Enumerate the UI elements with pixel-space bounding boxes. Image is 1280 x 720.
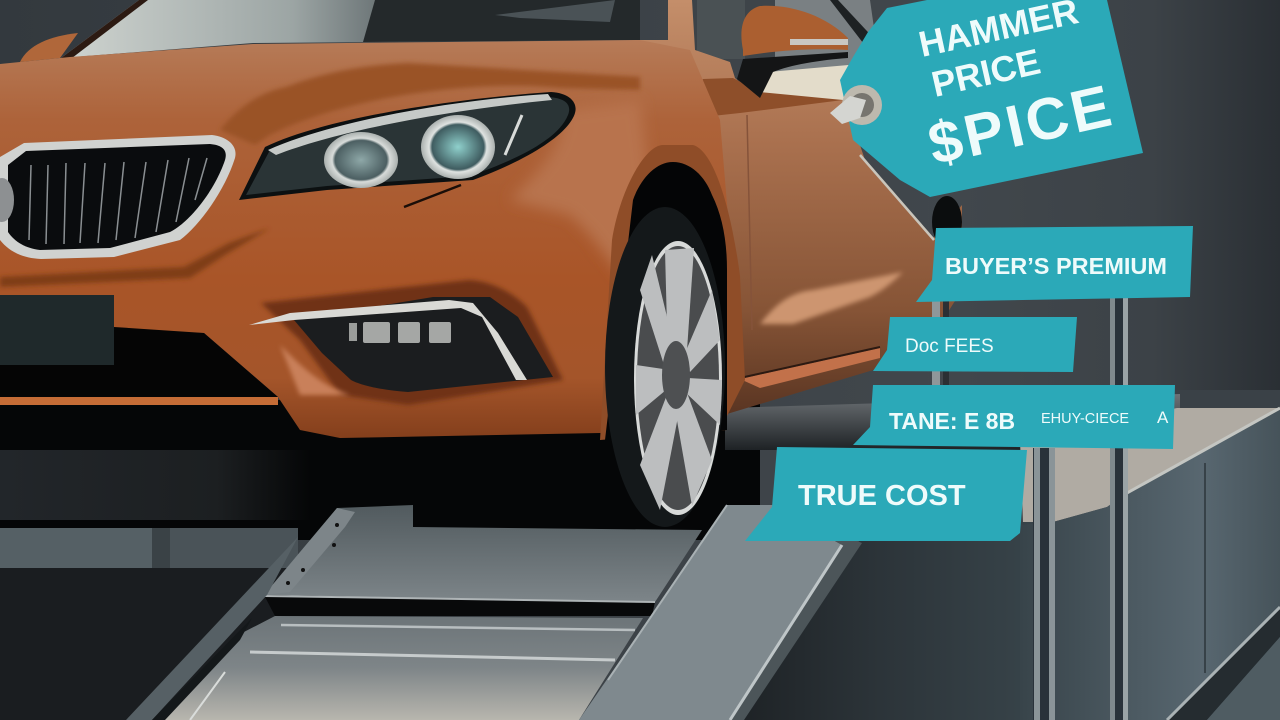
label: doc fees: Doc FEES xyxy=(905,336,994,357)
label: taxes and extras: A xyxy=(1157,408,1169,427)
spokes xyxy=(636,248,722,510)
label: buyer's premium xyxy=(916,226,1193,302)
label: true cost: TRUE COST xyxy=(798,480,966,512)
label: true cost xyxy=(745,447,1027,541)
hood crease shadow xyxy=(220,63,640,145)
far side mirror xyxy=(20,33,78,62)
access ramp xyxy=(126,505,862,720)
dark floor under the car xyxy=(0,400,760,540)
headlight xyxy=(239,92,576,207)
lower air intake xyxy=(0,327,278,397)
stage top surface xyxy=(1020,408,1280,522)
upper deck xyxy=(264,505,702,602)
right rail xyxy=(579,505,842,720)
price tag: hammer price: $PICE xyxy=(922,72,1120,178)
car front body xyxy=(0,40,735,438)
wheel arch xyxy=(600,145,745,440)
fog lamp surround shadow xyxy=(261,280,563,405)
left lower wall xyxy=(0,450,310,720)
lower bumper highlight xyxy=(280,345,350,395)
left rail xyxy=(126,537,298,720)
support poles xyxy=(932,298,1128,720)
stage front panels xyxy=(1020,408,1280,720)
wheel xyxy=(605,207,725,527)
string from tag to label xyxy=(860,155,934,240)
fender highlight xyxy=(510,100,650,280)
label: taxes and extras xyxy=(853,385,1175,449)
fog lamp xyxy=(249,297,553,392)
label: taxes and extras: TANE: E 8B xyxy=(889,408,1015,434)
lower deck xyxy=(157,616,643,720)
right lower floor xyxy=(720,520,1040,720)
windshield xyxy=(61,0,640,58)
label: doc fees xyxy=(873,317,1077,372)
bumper stripe xyxy=(0,397,278,405)
tag eyelet xyxy=(830,85,882,125)
side windows and background behind mirror xyxy=(697,0,880,100)
number plate recess xyxy=(0,295,114,365)
label: taxes and extras: EHUY-CIECE xyxy=(1041,411,1129,427)
price tag: hammer price: PRICE xyxy=(928,40,1044,105)
stage back strip xyxy=(1170,390,1280,410)
label: buyer's premium: BUYER’S PREMIUM xyxy=(945,253,1167,279)
lower bumper crease xyxy=(0,228,270,287)
near wing mirror xyxy=(737,6,848,98)
door and rear quarter xyxy=(640,0,962,414)
price tag: hammer price xyxy=(830,0,1143,197)
bracket with bolts xyxy=(264,508,355,595)
stage floor strip xyxy=(725,394,1180,450)
slash below light xyxy=(404,185,461,207)
grille xyxy=(0,135,236,259)
badge xyxy=(0,178,14,222)
